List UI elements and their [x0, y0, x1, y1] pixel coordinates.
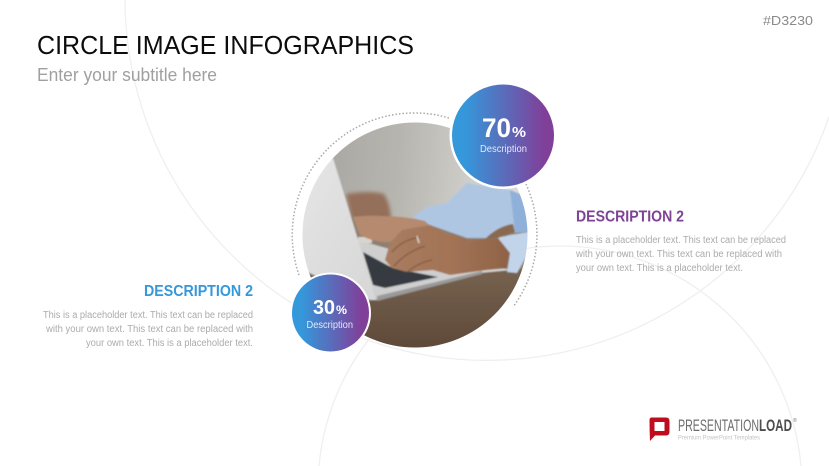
- text block: left description: your own text. This is a placeholder text.: [86, 338, 253, 349]
- laptop screen back: [295, 158, 376, 300]
- product code: #D3230: [763, 13, 813, 28]
- text block: right description: your own text. This is a placeholder text.: [576, 263, 743, 274]
- logo: PresentationLoad: ®: [793, 417, 797, 424]
- table: [309, 268, 522, 348]
- keyboard: [363, 252, 438, 288]
- icon: logo mark: [650, 418, 670, 441]
- photo: hands typing on a laptop: [302, 122, 528, 348]
- laptop base: [358, 242, 452, 298]
- badge: 70 percent: [450, 82, 556, 189]
- text block: right description: [575, 208, 786, 274]
- dotted ring: [292, 113, 537, 307]
- badge: 70 percent: %: [512, 124, 526, 141]
- wall: [308, 122, 520, 300]
- text block: right description: DESCRIPTION 2: [576, 208, 684, 226]
- blurred brown object: [346, 192, 391, 222]
- shirt cuff: [498, 232, 530, 273]
- badge: 70 percent: Description: [480, 144, 527, 155]
- text block: left description: [43, 283, 253, 349]
- back hand: [353, 216, 430, 242]
- subtitle: Enter your subtitle here: [37, 65, 217, 85]
- front hand and forearm: [385, 225, 510, 275]
- badge: 30 percent: 30: [313, 297, 335, 319]
- title: CIRCLE IMAGE INFOGRAPHICS: [37, 30, 414, 60]
- badge: 30 percent: %: [336, 303, 347, 317]
- text block: left description: This is a placeholder text. This text can be replaced: [43, 310, 253, 321]
- logo: PresentationLoad: PRESENTATION: [678, 417, 759, 435]
- badge: 30 percent: Description: [306, 320, 353, 331]
- text block: right description: with your own text. This text can be replaced with: [575, 249, 782, 260]
- badge: 70 percent: 70: [482, 113, 511, 143]
- logo: PresentationLoad: [650, 417, 797, 442]
- desk behind hands: [350, 216, 530, 272]
- logo: PresentationLoad: Premium PowerPoint Templates: [678, 434, 761, 442]
- ring: [417, 236, 419, 243]
- shirt: [413, 183, 530, 238]
- back forearm: [485, 224, 515, 239]
- badge: 30 percent: [290, 272, 371, 354]
- text block: left description: DESCRIPTION 2: [144, 283, 253, 300]
- text block: left description: with your own text. This text can be replaced with: [45, 324, 253, 335]
- silver tab: [358, 237, 372, 243]
- text block: right description: This is a placeholder text. This text can be replaced: [576, 235, 786, 246]
- logo: PresentationLoad: LOAD: [759, 417, 792, 435]
